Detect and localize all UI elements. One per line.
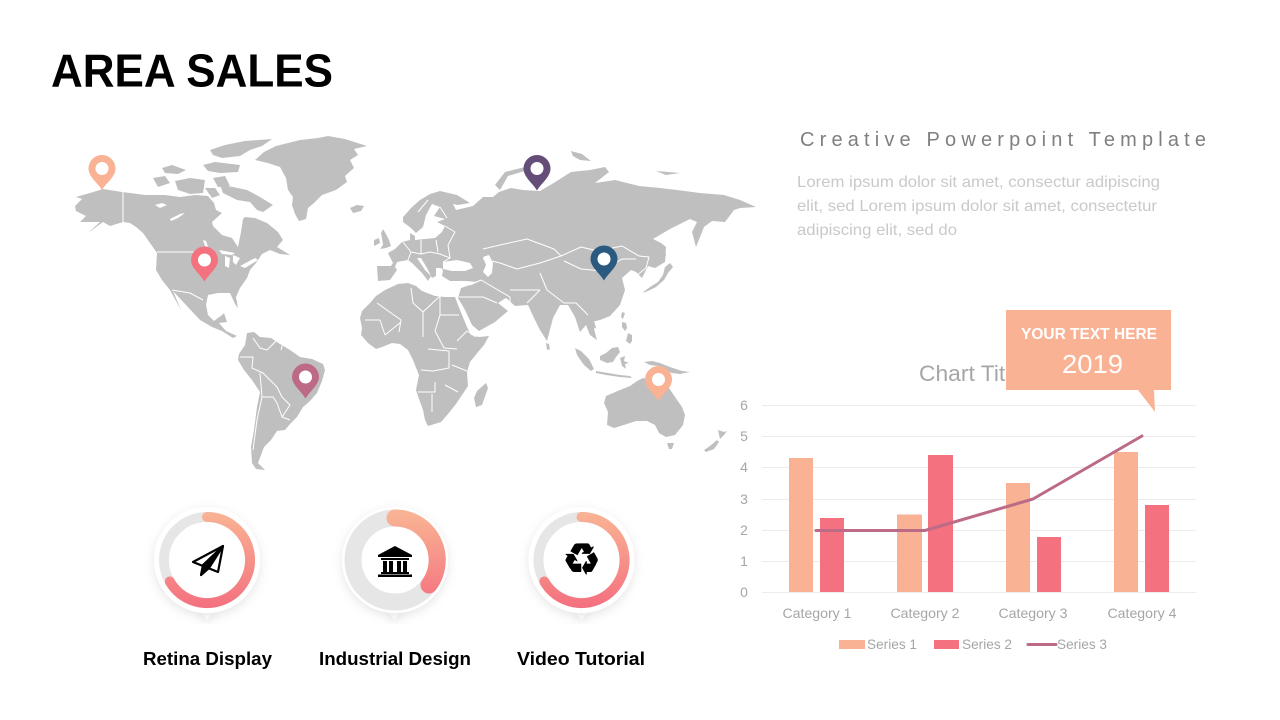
feature: Retina Display [143,507,272,669]
category labels [782,605,1177,621]
map: New Zealand [704,430,727,452]
map: Southeast Asian islands [575,318,632,378]
chart: combo bar and line [740,361,1196,652]
pin: Brazil [292,364,319,398]
text block: description [797,174,1160,239]
gridlines [762,406,1196,592]
map: Greenland [255,136,367,221]
icon: bank building [378,546,412,577]
y axis labels: 5 [740,428,748,444]
icon: recycle: ♻ [562,535,601,585]
text block: subtitle: Creative Powerpoint Template [800,129,1206,151]
ring badge [342,507,448,620]
pin: Russia [524,155,550,190]
map: Africa [360,283,489,426]
world map [75,136,756,470]
category labels: Category 1 [782,605,852,621]
feature: Industrial Design [319,507,471,669]
legend: Series 2 [962,636,1012,652]
label: Industrial Design [319,649,471,669]
y axis labels: 6 [740,397,748,413]
map: South America [238,332,325,470]
pin: United States [191,247,218,282]
y axis labels: 4 [740,459,748,475]
ring badge [528,507,634,620]
map: Madagascar [474,383,488,407]
legend: Series 1 [867,636,917,652]
icon: paper plane [193,546,223,575]
text block: description: adipiscing elit, sed do [797,222,957,239]
pin: Australia [645,366,672,401]
map: country borders [123,192,649,450]
series 1 bars [789,452,1138,592]
category labels: Category 3 [998,605,1068,621]
legend: Series 3 [1057,636,1107,652]
y axis labels: 1 [740,553,748,569]
feature: Video Tutorial [517,507,645,669]
map: Australia and Tasmania [604,378,685,449]
callout [1006,310,1171,412]
category labels: Category 2 [890,605,960,621]
label: Video Tutorial [517,649,645,669]
map: United Kingdom and Ireland [374,229,391,249]
map: New Guinea [644,361,690,374]
series 2 bars [820,455,1169,592]
chart title: Chart Title [919,361,1023,386]
y axis labels: 2 [740,522,748,538]
map: lakes and inland seas [155,203,493,277]
category labels: Category 4 [1108,605,1177,621]
y axis labels [740,397,748,600]
map: Sri Lanka and Taiwan [546,312,625,350]
text block: description: elit, sed Lorem ipsum dolor sit amet, consectetur [797,198,1158,215]
ring badge [154,507,260,620]
series 3 line [816,436,1142,530]
map: Japan [642,247,673,293]
label: Retina Display [143,649,272,669]
pin: Alaska [88,155,116,190]
legend [839,636,1107,652]
map: Eurasia [377,167,756,341]
y axis labels: 3 [740,491,748,507]
text block: description: Lorem ipsum dolor sit amet, consectur adipiscing [797,174,1160,191]
map: Arctic Russian islands [495,151,680,190]
y axis labels: 0 [740,584,748,600]
map: Iceland [350,205,364,213]
callout: YOUR TEXT HERE [1021,326,1157,343]
map: Canadian Arctic islands [153,139,273,212]
map: North America [75,189,290,338]
pin: China [590,245,618,280]
title: AREA SALES [51,44,333,96]
callout: 2019 [1062,349,1123,379]
